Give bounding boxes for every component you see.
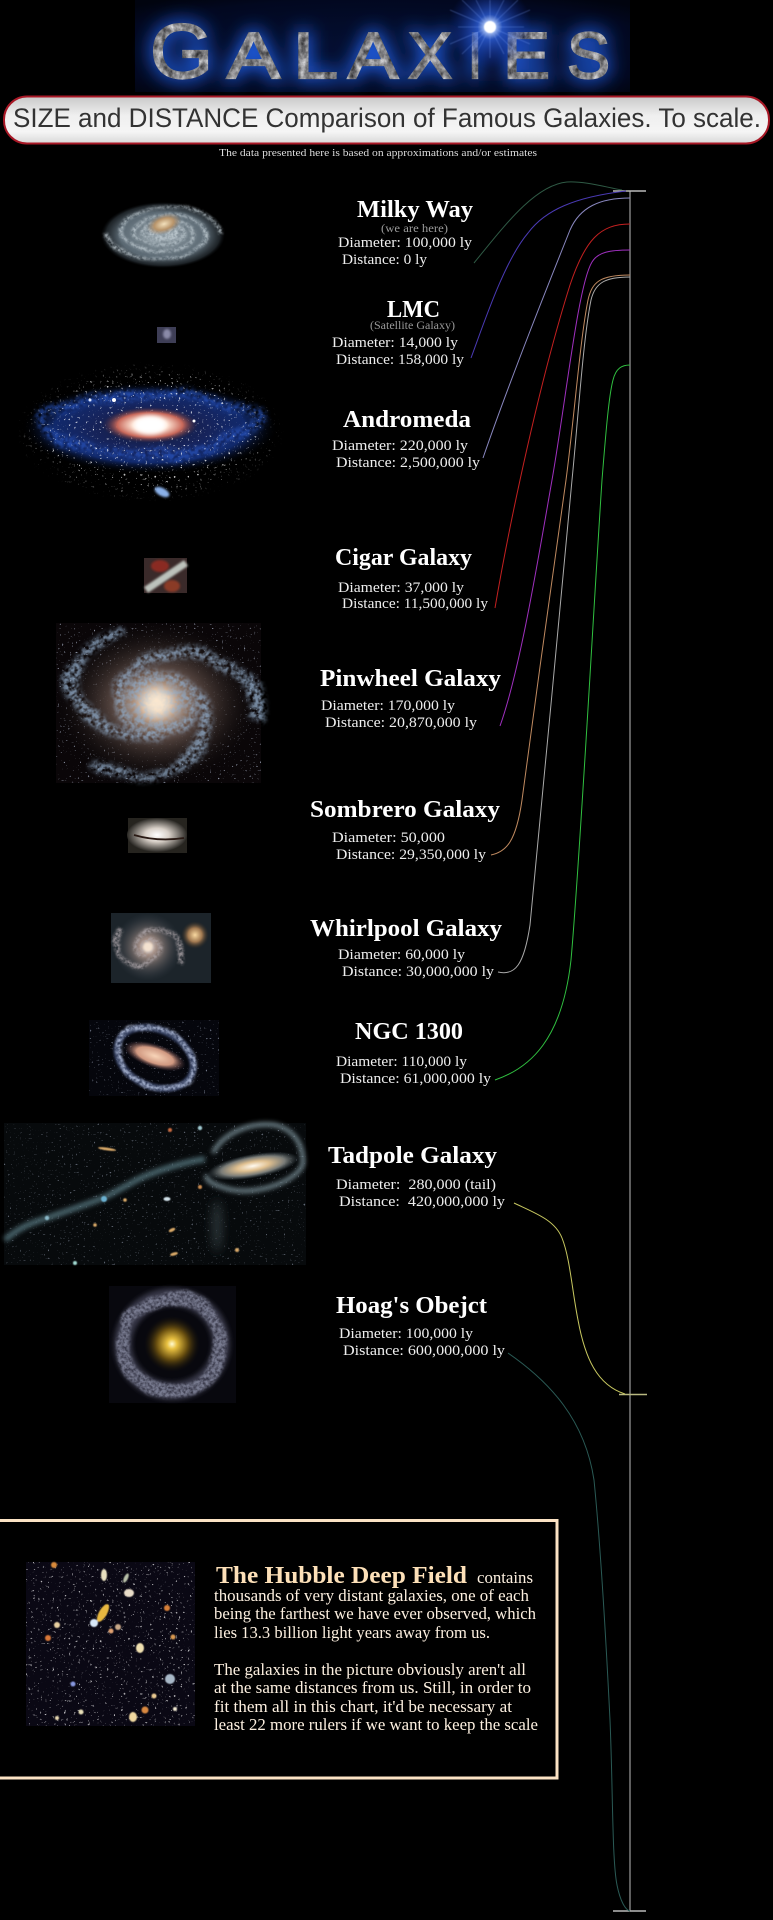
Tadpole Galaxy label: Distance: 420,000,000 ly (339, 1194, 506, 1210)
title word (150, 9, 610, 95)
Milky Way label: Milky Way (357, 197, 473, 223)
LMC label: Diameter: 14,000 ly (332, 335, 459, 351)
Hubble Deep Field text: fit them all in this chart, it'd be necessary at (214, 1697, 512, 1716)
Andromeda label (332, 407, 481, 471)
Andromeda label: Diameter: 220,000 ly (332, 438, 469, 454)
panel: Hubble Deep Field (0, 1520, 557, 1778)
subtitle banner (4, 96, 769, 144)
NGC 1300 image (89, 1016, 219, 1100)
title glow: A (227, 19, 281, 92)
title word: A (348, 19, 399, 92)
title glow: A (348, 19, 399, 92)
NGC 1300 label: NGC 1300 (355, 1019, 463, 1045)
title glow: X (408, 19, 452, 92)
Sombrero Galaxy image (127, 818, 187, 853)
Hoag's Object label: Distance: 600,000,000 ly (343, 1343, 506, 1359)
Cigar Galaxy label (335, 545, 489, 612)
Tadpole Galaxy label: Tadpole Galaxy (328, 1143, 497, 1169)
Pinwheel Galaxy label: Distance: 20,870,000 ly (325, 715, 478, 731)
Andromeda label: Distance: 2,500,000 ly (336, 455, 481, 471)
distance ruler (613, 191, 647, 1911)
Hoag's Object image (109, 1286, 236, 1403)
Whirlpool Galaxy label: Diameter: 60,000 ly (338, 947, 466, 963)
data disclaimer: The data presented here is based on approximations and/or estimates (219, 147, 537, 159)
Hoag's Object label (336, 1293, 506, 1359)
Milky Way image (101, 202, 225, 268)
Cigar Galaxy label: Diameter: 37,000 ly (338, 580, 465, 596)
Andromeda label: Andromeda (343, 407, 471, 433)
Cigar Galaxy label: Cigar Galaxy (335, 545, 472, 571)
Hubble Deep Field text (214, 1563, 538, 1734)
title glow: E (503, 19, 550, 92)
Pinwheel Galaxy label: Diameter: 170,000 ly (321, 698, 456, 714)
Hubble Deep Field image (26, 1562, 195, 1726)
Whirlpool Galaxy label: Distance: 30,000,000 ly (342, 964, 495, 980)
NGC 1300 label: Diameter: 110,000 ly (336, 1054, 468, 1070)
LMC label (332, 297, 464, 368)
title glow: I (468, 19, 482, 92)
Hubble Deep Field text: The Hubble Deep Field (216, 1563, 468, 1589)
Milky Way label: Distance: 0 ly (342, 252, 427, 268)
Hubble Deep Field text: being the farthest we have ever observed, which (214, 1604, 537, 1623)
title glow: L (293, 19, 338, 92)
Milky Way label: Diameter: 100,000 ly (338, 235, 473, 251)
Sombrero Galaxy label: Diameter: 50,000 (332, 830, 445, 846)
NGC 1300 label: Distance: 61,000,000 ly (340, 1071, 492, 1087)
title word: E (503, 19, 550, 92)
Hoag's Object label: Diameter: 100,000 ly (339, 1326, 474, 1342)
Hubble Deep Field text: The galaxies in the picture obviously aren't all (214, 1660, 526, 1679)
LMC image (157, 327, 176, 343)
Pinwheel Galaxy label: Pinwheel Galaxy (320, 666, 501, 692)
title word: S (567, 19, 610, 92)
Sombrero Galaxy label: Sombrero Galaxy (310, 797, 500, 823)
Tadpole Galaxy label: Diameter: 280,000 (tail) (336, 1177, 496, 1193)
Whirlpool Galaxy image (107, 913, 211, 983)
Sombrero Galaxy label (310, 797, 500, 863)
title glow (150, 9, 610, 95)
Hubble Deep Field text: at the same distances from us. Still, in order to (214, 1678, 531, 1697)
Tadpole Galaxy label (328, 1143, 506, 1210)
Andromeda image (12, 362, 284, 506)
Hoag's Object label: Hoag's Obejct (336, 1293, 487, 1319)
Cigar Galaxy image (144, 558, 187, 593)
Hubble Deep Field text: thousands of very distant galaxies, one of each (214, 1586, 530, 1605)
Pinwheel Galaxy label (320, 666, 501, 731)
Hubble Deep Field text: contains (477, 1568, 533, 1587)
Cigar Galaxy label: Distance: 11,500,000 ly (342, 596, 489, 612)
Tadpole Galaxy image (4, 1123, 306, 1265)
connector curves (471, 182, 630, 1911)
NGC 1300 label (336, 1019, 492, 1087)
LMC label: Distance: 158,000 ly (336, 352, 464, 368)
Milky Way label (338, 197, 473, 268)
title word: I (468, 19, 482, 92)
Whirlpool Galaxy label: Whirlpool Galaxy (310, 916, 502, 942)
title glow: G (150, 9, 213, 95)
title word: G (150, 9, 213, 95)
Milky Way label: (we are here) (381, 221, 448, 235)
title word: X (408, 19, 452, 92)
title word: L (293, 19, 338, 92)
LMC label: (Satellite Galaxy) (370, 318, 455, 332)
Hubble Deep Field text: lies 13.3 billion light years away from us. (214, 1623, 490, 1642)
Pinwheel Galaxy image (56, 620, 268, 800)
title glow: S (567, 19, 610, 92)
icon: star flare (448, 0, 532, 69)
title word: A (227, 19, 281, 92)
LMC label: LMC (387, 297, 440, 323)
Hubble Deep Field text: least 22 more rulers if we want to keep the scale (214, 1715, 538, 1734)
subtitle banner: SIZE and DISTANCE Comparison of Famous Galaxies. To scale. (13, 103, 761, 133)
Whirlpool Galaxy label (310, 916, 502, 980)
title banner (135, 0, 630, 95)
Sombrero Galaxy label: Distance: 29,350,000 ly (336, 847, 487, 863)
